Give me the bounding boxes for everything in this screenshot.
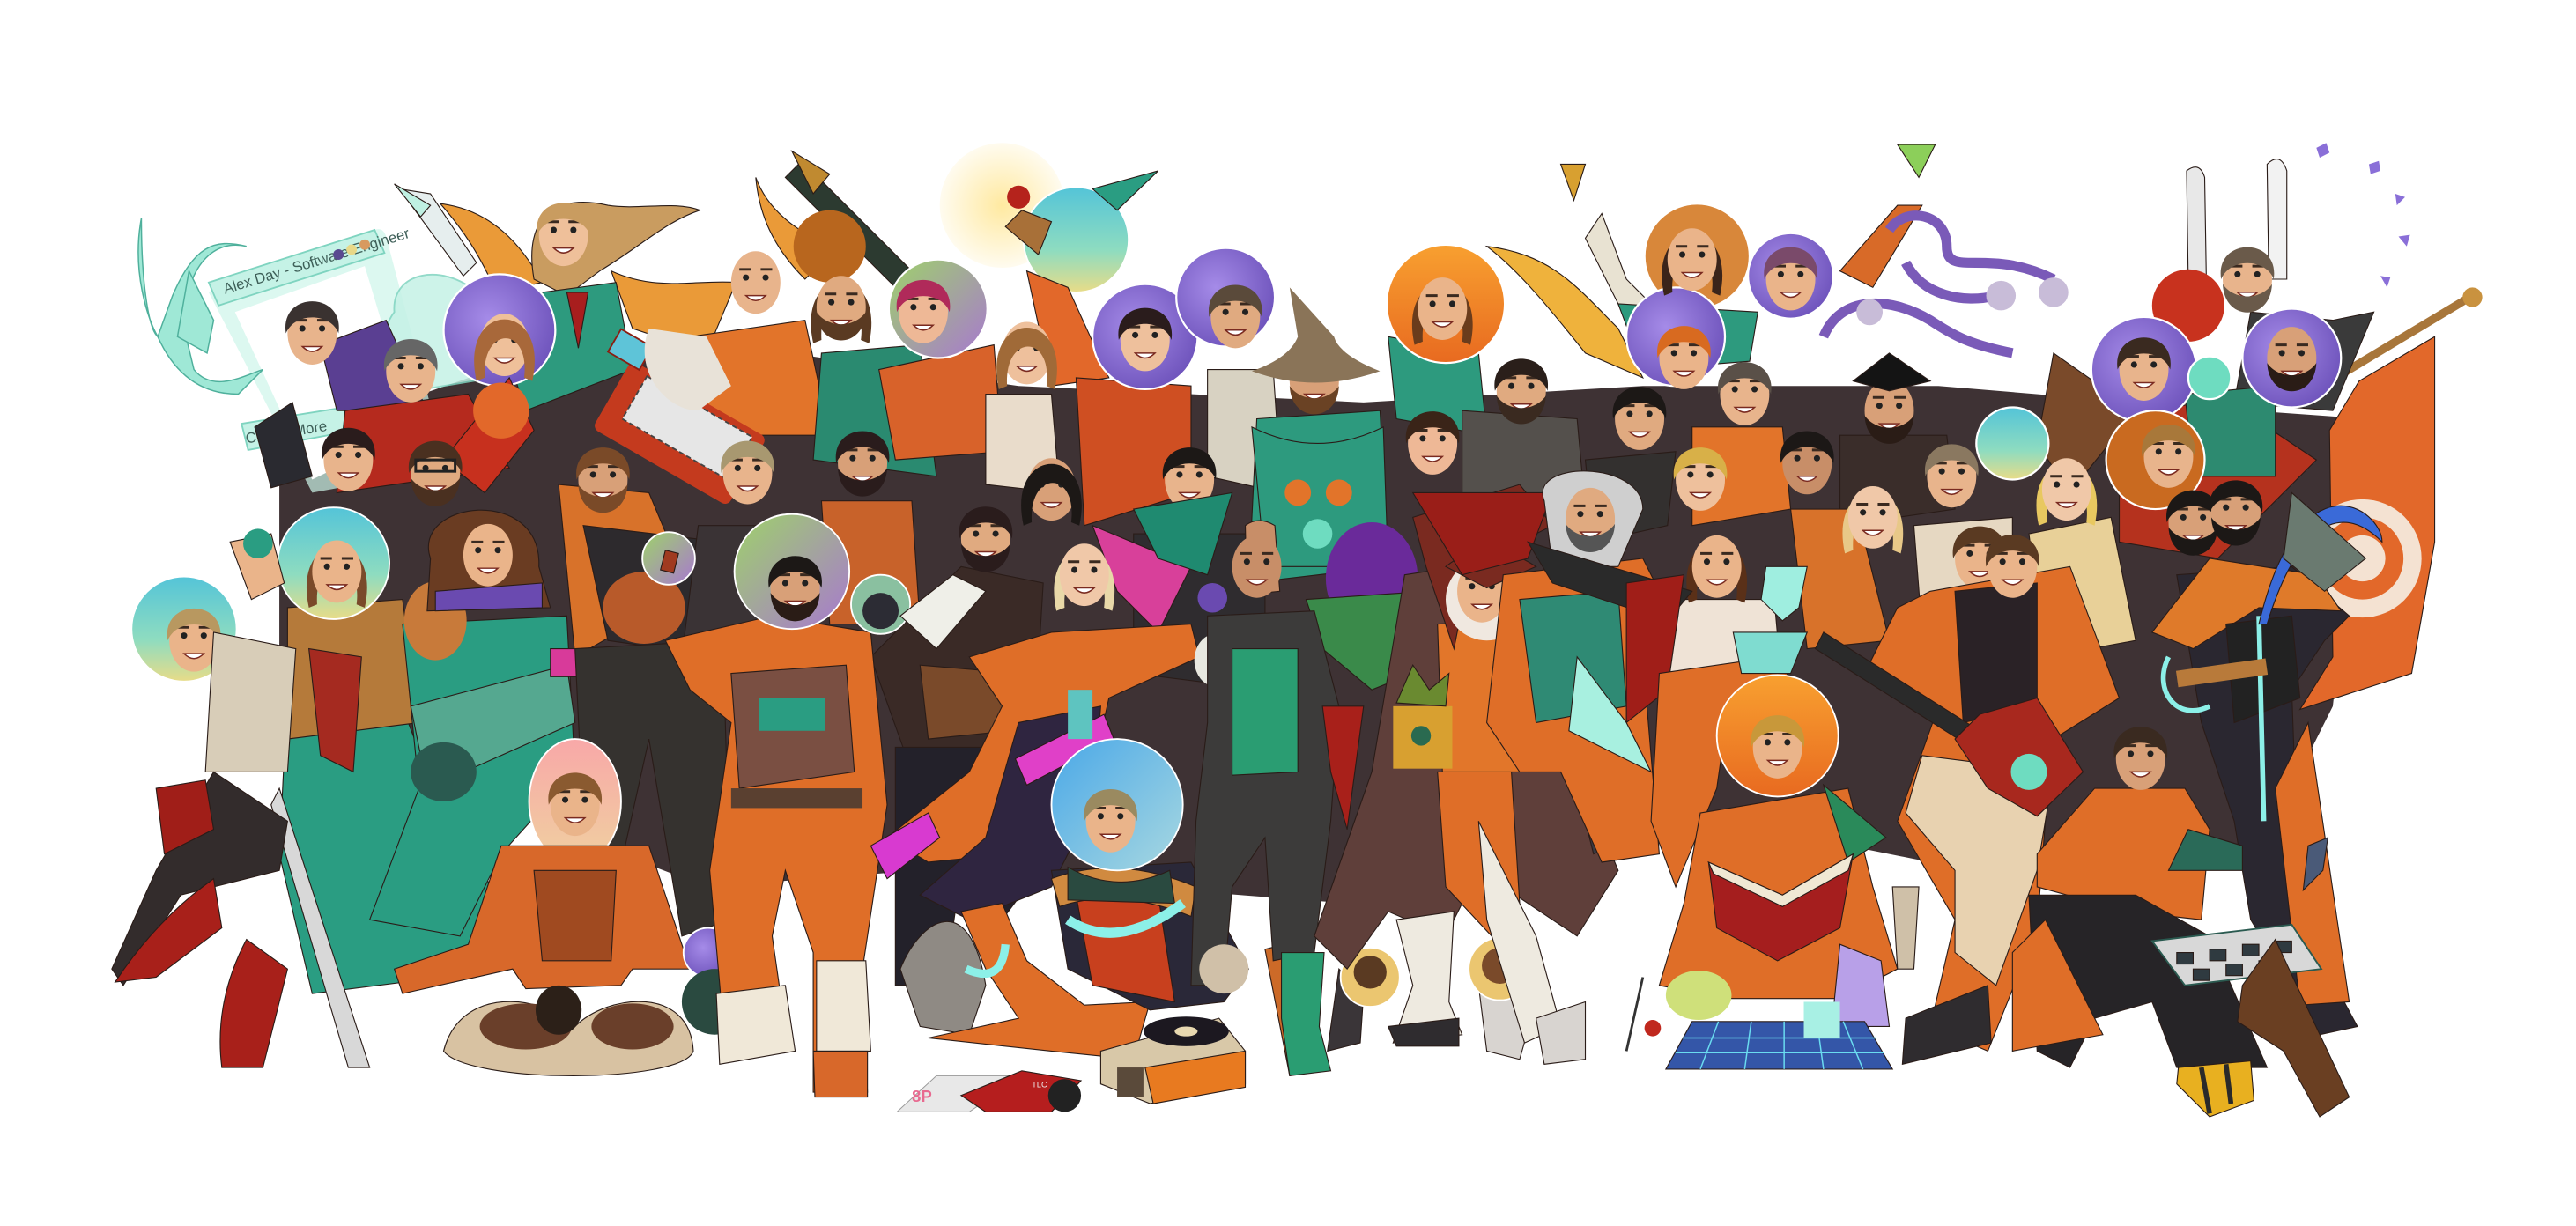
guitar neck and brass machine <box>785 151 920 292</box>
back row faces <box>285 228 2316 488</box>
central orange astronaut with green helmet <box>665 514 910 1097</box>
red-hat man with long brown coat <box>1314 484 1630 1064</box>
background crowd mass <box>279 353 2365 904</box>
flag: orange banner with target <box>2300 287 2483 710</box>
white-haired man with red cape <box>1322 471 1692 862</box>
green dress woman with helmet <box>230 507 509 1067</box>
wizard green suit with portals <box>1252 427 1388 566</box>
holographic grid mat <box>1626 977 1892 1069</box>
dancing blonde astronaut <box>870 543 1237 920</box>
helmeted man at far left with red boots <box>112 577 296 1067</box>
tron suit man <box>2152 480 2382 1035</box>
flying blonde woman <box>395 184 700 410</box>
record sleeves: TLC <box>1032 1080 1047 1089</box>
dark legged man and chicken <box>575 532 731 936</box>
software window with dragon <box>138 218 492 492</box>
middle row bodies <box>559 484 2136 772</box>
wizard hat <box>1252 287 1380 382</box>
orange female astronaut and glowing figure <box>1569 566 1807 887</box>
planet helmet with cup <box>940 143 1158 386</box>
back row: orange capes and swooshes <box>440 177 1643 378</box>
back row bodies <box>321 270 2374 583</box>
feather plume and purple plant <box>1092 492 1429 690</box>
helmets back row <box>444 203 2341 509</box>
crouching man and chess board <box>2012 727 2350 1117</box>
button text: Create More <box>244 417 328 447</box>
red astronaut suit and dark sleeve <box>255 378 534 492</box>
striped sweater man legs <box>895 575 1051 986</box>
record sleeves: 8P <box>912 1087 932 1105</box>
purple tentacle creature <box>1824 216 2069 353</box>
cats in helmets <box>1328 938 1536 1060</box>
seated woman in orange sweater with pink helmet <box>395 739 748 1075</box>
middle row faces <box>322 411 2220 602</box>
cat on shoulder <box>645 329 731 410</box>
green jacket woman with binoculars <box>370 510 588 936</box>
reading man with book and halo <box>1659 675 1898 1026</box>
record sleeves <box>897 1071 1081 1112</box>
centre man in green scale armor <box>1191 521 1339 1075</box>
wine glass arm <box>1561 144 1936 336</box>
seated astronaut with blue helmet and gray cat <box>900 739 1328 1075</box>
window title text: Alex Day - Software Engineer <box>221 225 411 298</box>
keyboard synth <box>571 329 778 506</box>
record player <box>1100 1016 1246 1104</box>
back row: skis and gems <box>2187 143 2410 287</box>
guitar player <box>1816 535 2120 1064</box>
